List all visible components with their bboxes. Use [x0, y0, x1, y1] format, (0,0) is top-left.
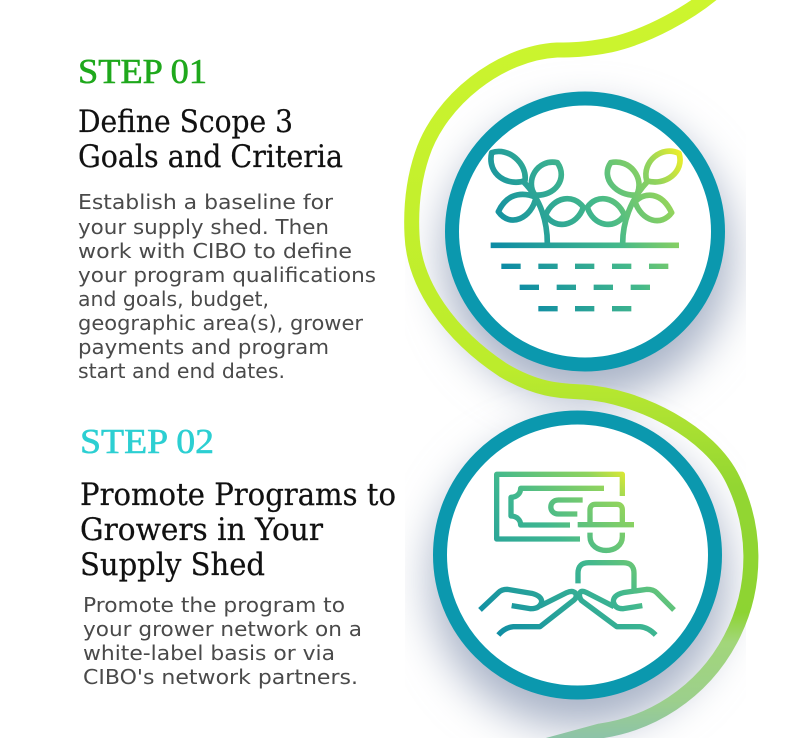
body text: step 01: and goals, budget, — [78, 287, 269, 311]
title: define scope 3 — [78, 104, 343, 175]
body text: step 01 — [78, 190, 376, 383]
title: promote programs: Promote Programs to — [80, 477, 396, 513]
heading: step 02: STEP 02 — [80, 422, 214, 461]
title: define scope 3: Goals and Criteria — [78, 139, 343, 175]
body text: step 01: your supply shed. Then — [78, 215, 329, 239]
body text: step 01: start and end dates. — [78, 359, 285, 383]
body text: step 01: geographic area(s), grower — [78, 311, 364, 335]
body text: step 02: white-label basis or via — [83, 641, 335, 665]
circle 2 — [440, 418, 715, 692]
title: define scope 3: Define Scope 3 — [78, 104, 293, 140]
body text: step 01: work with CIBO to define — [78, 239, 352, 263]
body text: step 01: payments and program — [78, 335, 329, 359]
circle 1 — [452, 98, 718, 364]
body text: step 02 — [83, 593, 362, 689]
title: promote programs: Supply Shed — [80, 547, 265, 583]
icon: plants and soil — [491, 151, 680, 309]
curved ribbon — [412, 0, 751, 738]
body text: step 01: Establish a baseline for — [78, 190, 334, 214]
heading: step 01: STEP 01 — [78, 52, 207, 91]
body text: step 02: your grower network on a — [83, 617, 362, 641]
circle shadows — [431, 112, 731, 728]
body text: step 02: CIBO's network partners. — [83, 665, 358, 689]
body text: step 01: your program qualifications — [78, 263, 376, 287]
icon: money, grower and hands — [480, 474, 674, 635]
title: promote programs: Growers in Your — [80, 512, 323, 548]
body text: step 02: Promote the program to — [83, 593, 345, 617]
title: promote programs — [80, 477, 396, 583]
